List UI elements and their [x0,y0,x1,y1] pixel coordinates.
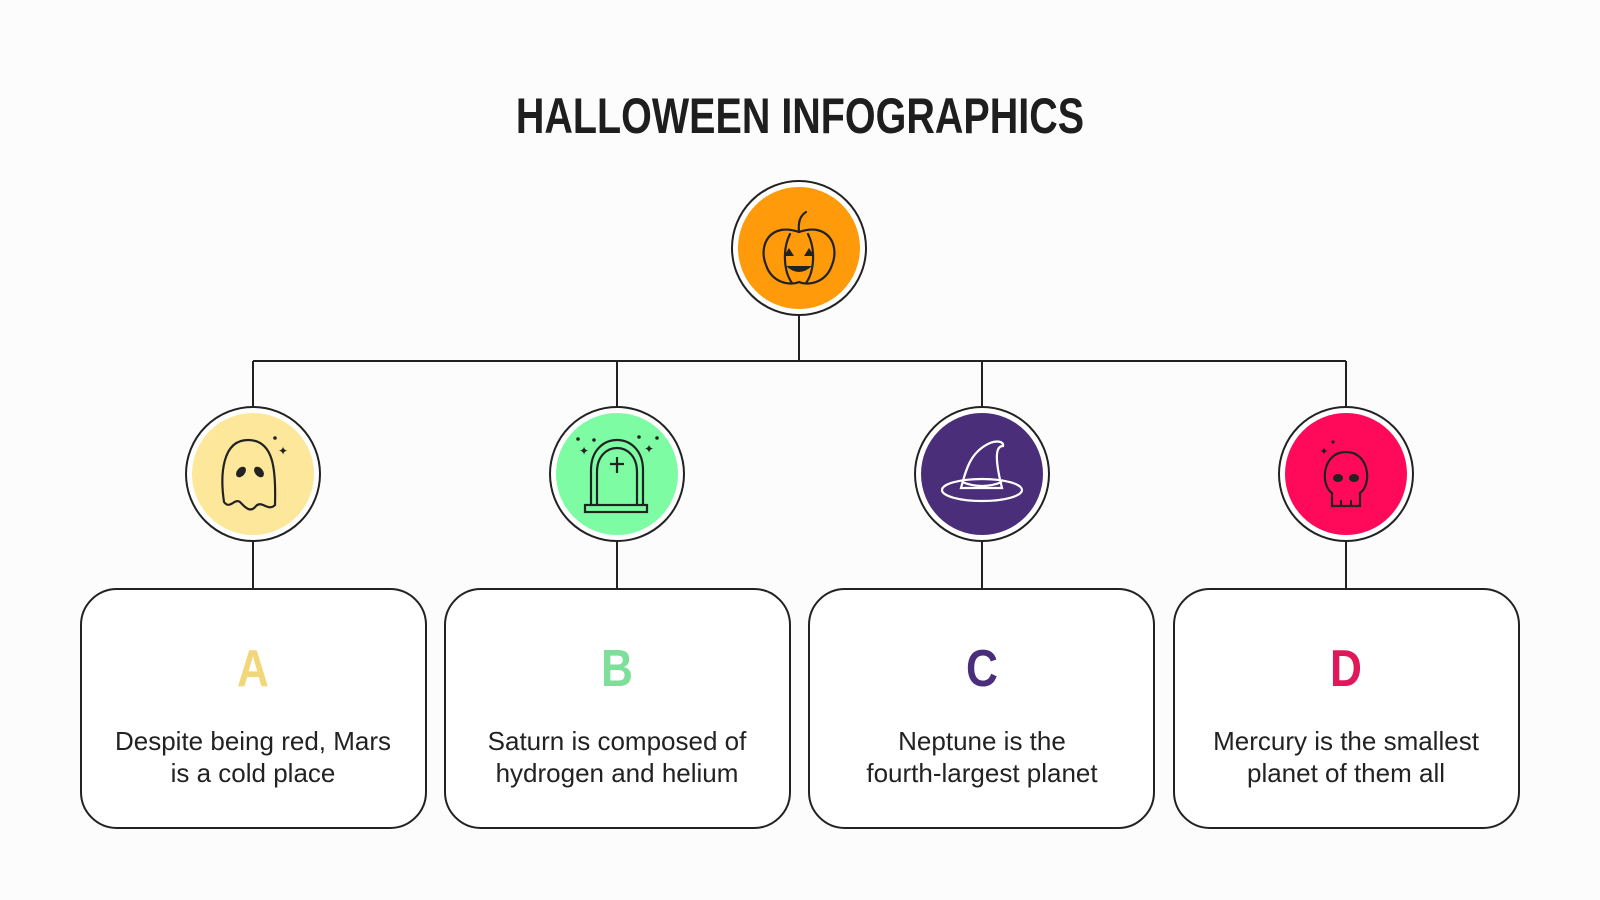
title: HALLOWEEN INFOGRAPHICS [516,88,1084,144]
panel: A [81,589,426,828]
icon: skull node [1279,407,1413,541]
panel: B: B [601,640,633,698]
icon: skull node: ✦ [1319,446,1329,458]
icon: witch hat node [915,407,1049,541]
panel: D: D [1330,640,1362,698]
icon: pumpkin root node [732,181,866,315]
icon: ghost node [186,407,320,541]
icon: tombstone node: ✦ [579,444,589,458]
icon: tombstone node: ✦ [644,442,654,456]
panel: C: C [966,640,998,698]
panel: A: Despite being red, Mars [115,726,391,756]
panel: C [809,589,1154,828]
panel: A: A [237,640,269,698]
icon: ghost node: ✦ [278,444,288,458]
panel: A: is a cold place [171,758,335,788]
panel: D: planet of them all [1247,758,1445,788]
connector lines [253,315,1346,589]
panel: D: Mercury is the smallest [1213,726,1480,756]
panel: B: Saturn is composed of [488,726,747,756]
panel: C: fourth-largest planet [866,758,1098,788]
panel: C: Neptune is the [898,726,1066,756]
icon: tombstone node [550,407,684,541]
panel: D [1174,589,1519,828]
panel: B [445,589,790,828]
panel: B: hydrogen and helium [496,758,738,788]
